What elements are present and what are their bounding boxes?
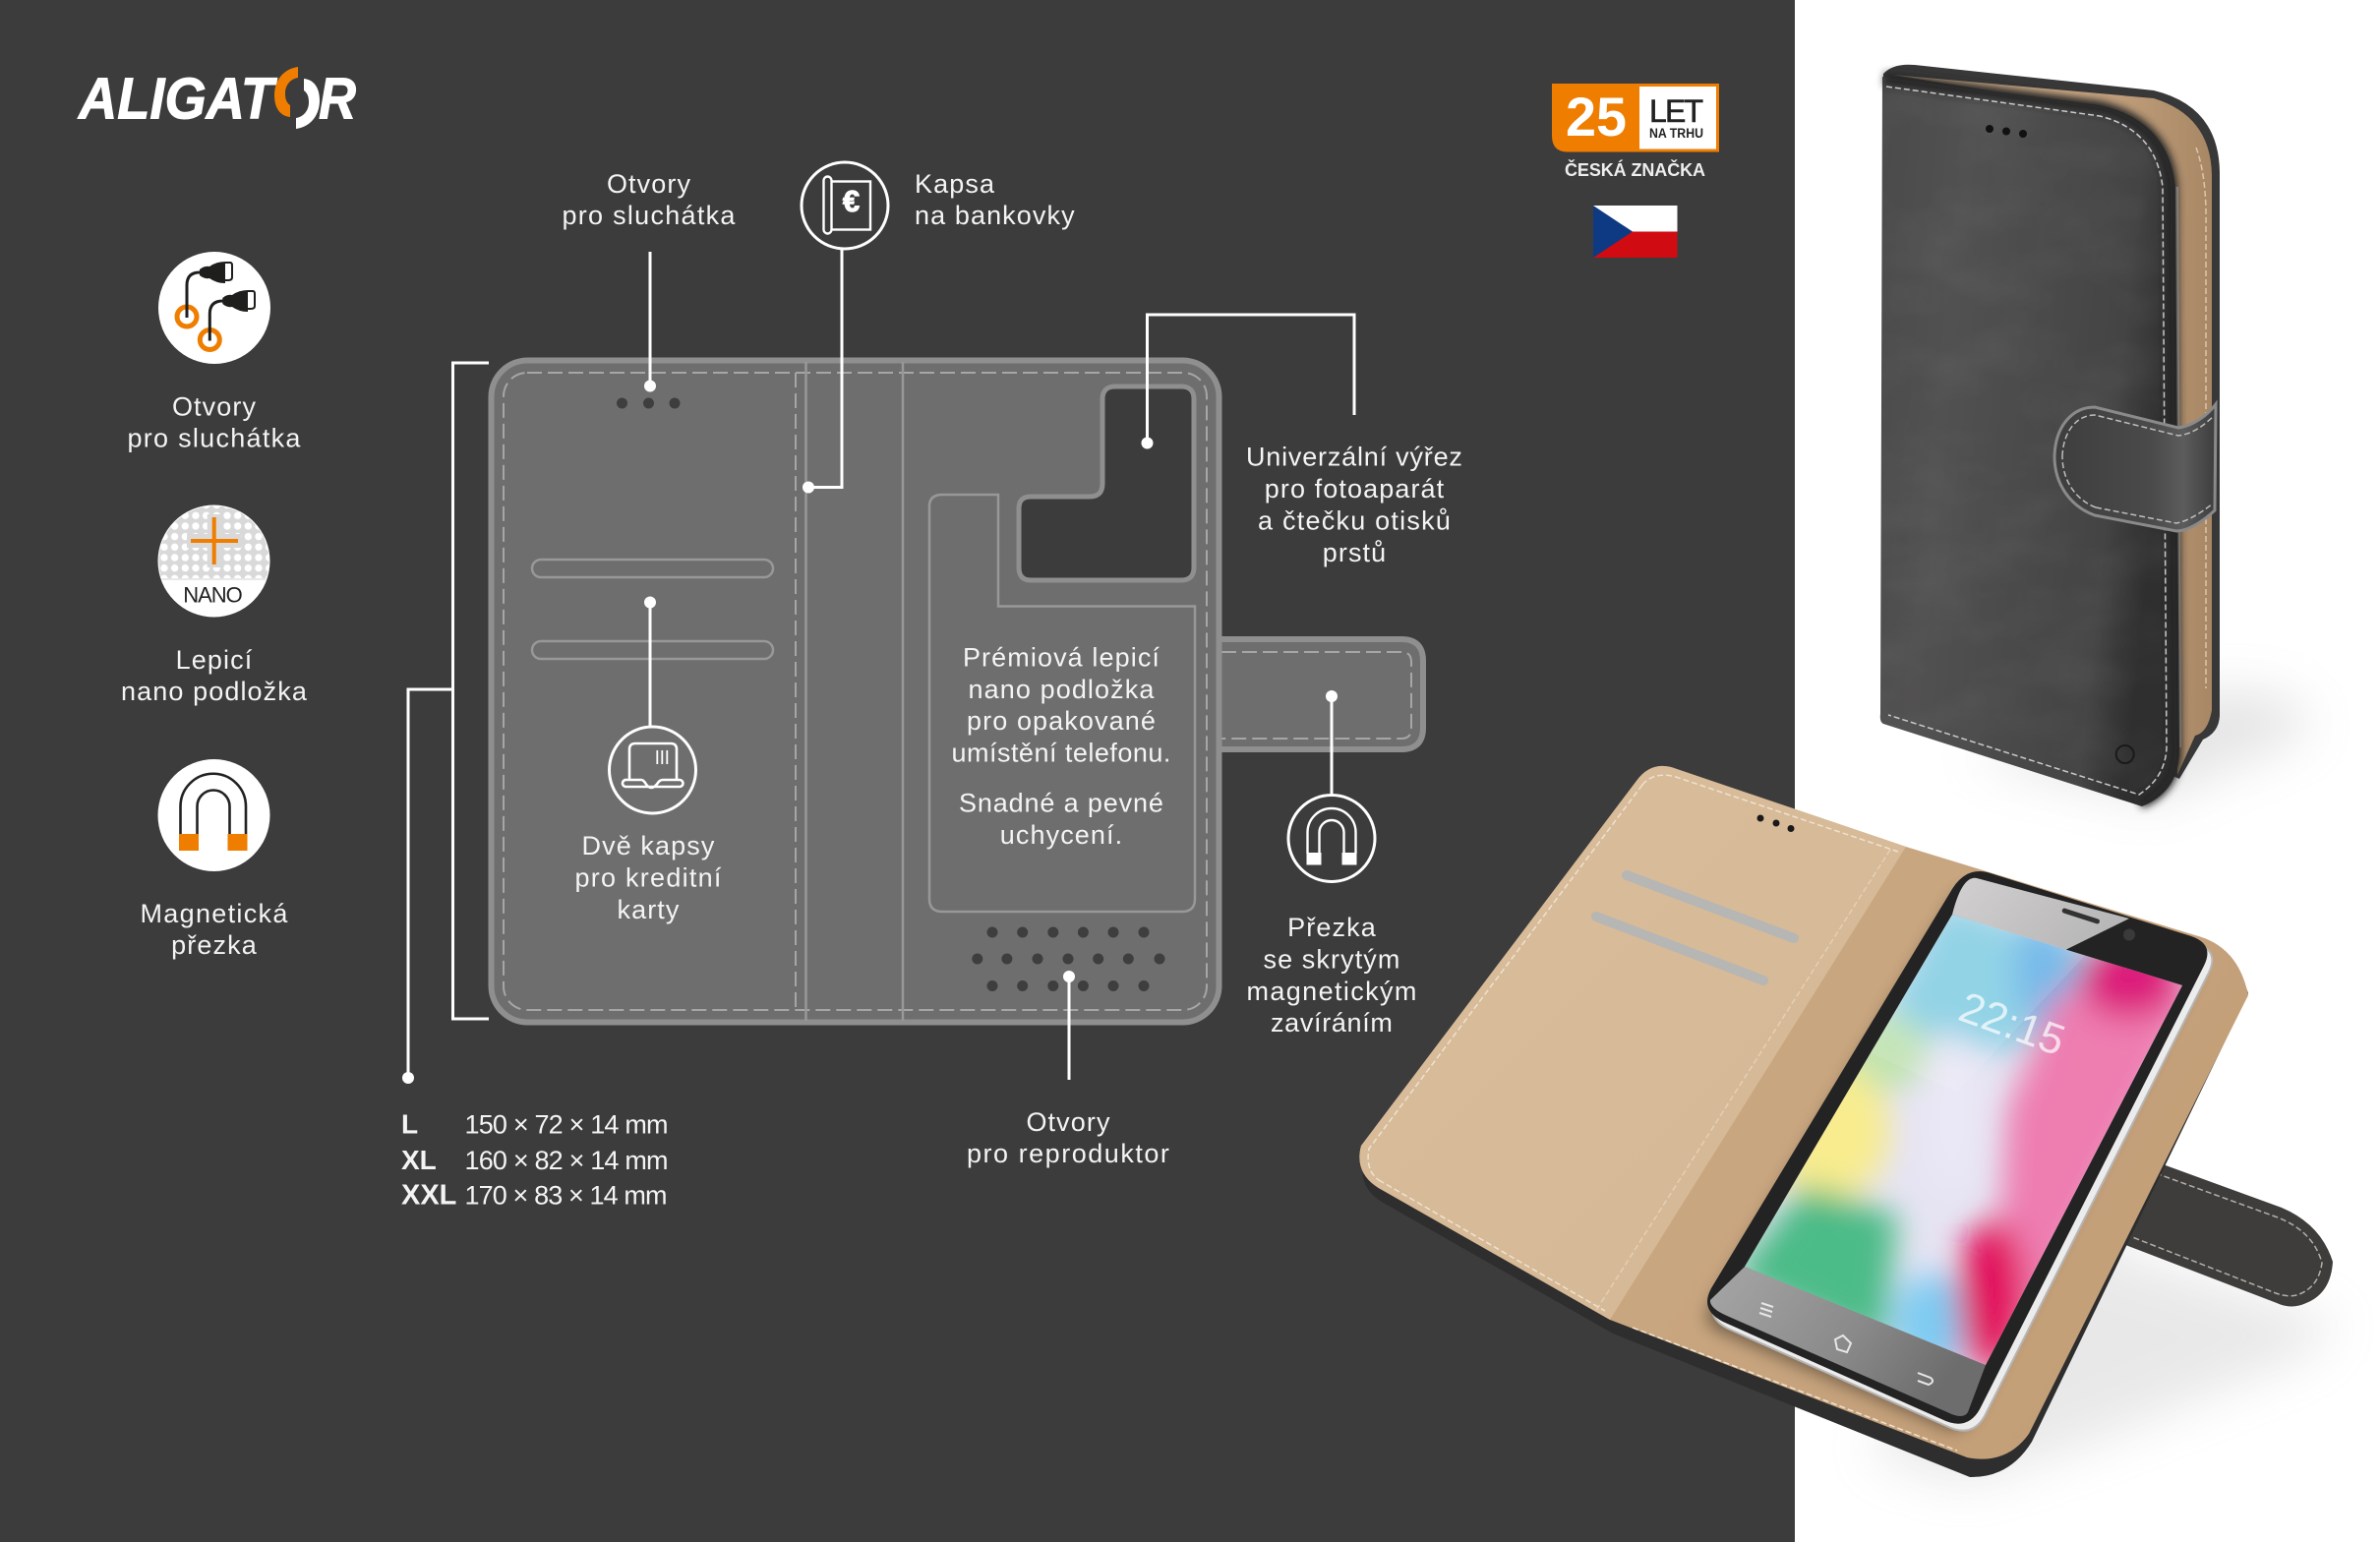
label: card pockets: karty [617,895,681,924]
label: nano pad: nano podložka [121,677,308,706]
label: speaker: pro reproduktor [967,1139,1170,1168]
badge: 25 years: NA TRHU [1649,126,1703,141]
phone [1707,871,2212,1431]
camera cutout [1019,386,1194,580]
label: nano pad description: Prémiová lepicí [963,643,1160,673]
label: earphone openings: pro sluchátka [128,423,301,452]
label: camera cutout: a čtečku otisků [1258,505,1452,535]
label: card pockets: pro kreditní [574,863,722,893]
label: nano pad description: nano podložka [969,675,1155,704]
label: magnetic clasp: přezka [171,930,258,960]
diagram: clasp tab [1216,639,1423,749]
label: clasp: magnetickým [1247,977,1418,1006]
badge: 25 years [1552,84,1719,180]
label: nano pad description: Snadné a pevné [959,789,1164,818]
size table: 170 × 83 × 14 mm [464,1180,667,1210]
label: clasp: se skrytým [1263,944,1401,974]
label: camera cutout: Univerzální výřez [1246,443,1463,472]
speaker holes [972,926,1164,991]
badge: 25 years: ČESKÁ ZNAČKA [1565,159,1705,180]
earphone holes [617,397,681,409]
clasp strap [2115,1161,2333,1306]
size table: XXL [401,1180,456,1212]
label: nano pad: Lepicí [176,645,253,675]
label: earphone openings: Otvory [172,391,257,421]
icon: earphone openings [158,252,270,364]
size table: 150 × 72 × 14 mm [464,1109,669,1139]
label: nano pad description: umístění telefonu. [952,738,1172,767]
label: nano pad description: uchycení. [1000,820,1123,850]
icon: banknote pocket [802,162,888,249]
label: nano pad description: pro opakované [967,706,1157,736]
dark main panel [0,0,1795,1542]
photo: closed wallet case [1880,65,2311,806]
label: card pockets: Dvě kapsy [582,831,715,860]
icon: nano pad: NANO [183,582,243,608]
leader: speaker [1063,971,1075,1080]
badge: 25 years: LET [1649,93,1703,129]
size table: 160 × 82 × 14 mm [464,1146,669,1175]
dot: bracket end [402,1072,414,1084]
leader: banknote pocket [803,249,842,494]
icon: Czech flag [1593,206,1678,258]
screen wallpaper [1745,915,2182,1365]
icon: magnet [1288,795,1375,881]
label: camera cutout: prstů [1323,538,1387,567]
leader: clasp [1326,690,1338,795]
lock screen time: 22:15 [1953,983,2071,1065]
label: earphone openings top: Otvory [607,169,691,199]
size table [401,1109,669,1212]
logo: ALIGATOR: R [319,67,356,132]
badge: 25 years: 25 [1566,86,1627,148]
icon: magnetic clasp [157,759,269,871]
nano pad outline [929,495,1195,912]
icon: nano pad [157,504,270,618]
card slots [1596,875,1794,980]
card slots [532,560,773,659]
bracket: case height [408,363,489,1078]
label: banknote pocket: na bankovky [915,201,1076,230]
icon: card pockets [610,727,696,813]
label: clasp: zavíráním [1271,1008,1394,1038]
phone buttons [1759,1303,1933,1385]
label: banknote pocket: Kapsa [915,169,995,199]
leader: camera cutout [1141,315,1354,448]
left flap [1359,766,1906,1320]
leader: earphone label [644,252,656,391]
photo: open case with phone [1359,766,2341,1485]
logo: ALIGATOR: ALIGAT [77,67,278,132]
leader: card pockets [644,596,656,726]
size table: L [401,1109,418,1139]
label: speaker: Otvory [1026,1107,1111,1137]
label: clasp: Přezka [1287,913,1377,942]
size table: XL [401,1145,437,1175]
icon: banknote pocket: € [843,184,860,218]
label: earphone openings top: pro sluchátka [563,201,736,230]
tan inner lining [1359,766,2248,1459]
diagram: open case [492,360,1220,1023]
label: magnetic clasp: Magnetická [140,899,289,928]
label: camera cutout: pro fotoaparát [1265,474,1445,504]
